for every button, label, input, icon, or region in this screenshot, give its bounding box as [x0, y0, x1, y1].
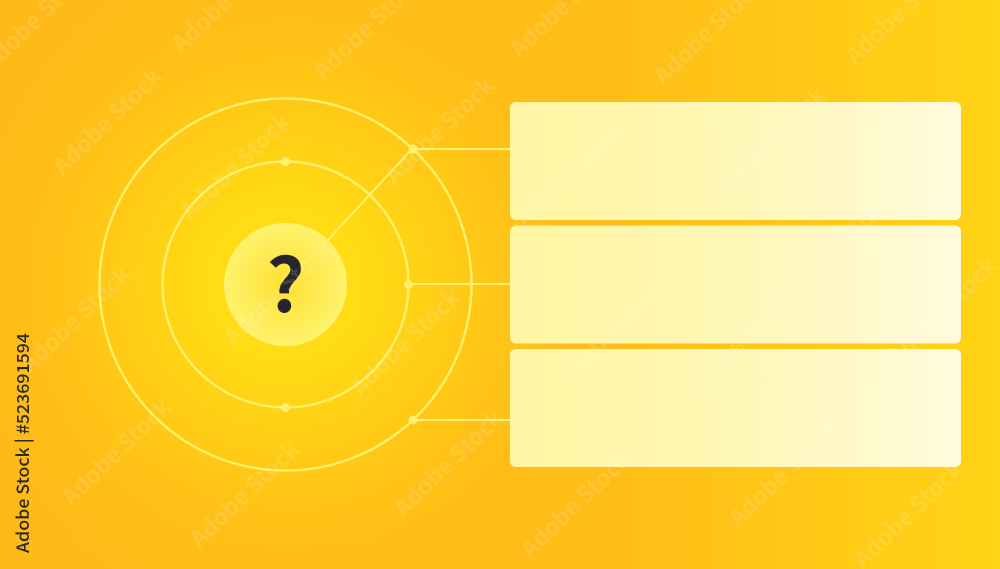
panel: bottom box	[510, 349, 961, 467]
outer ring	[100, 98, 472, 470]
question mark: ?	[266, 227, 305, 334]
watermarks: Adobe Stock	[547, 270, 673, 393]
watermarks: Adobe Stock	[11, 257, 137, 380]
watermarks: Adobe Stock	[707, 78, 833, 201]
watermarks: Adobe Stock	[52, 390, 178, 513]
watermarks: Adobe Stock	[384, 401, 510, 524]
watermarks: Adobe Stock	[836, 124, 962, 247]
centre hub with question mark	[224, 223, 347, 346]
watermarks: Adobe Stock	[180, 432, 306, 555]
watermarks: Adobe Stock	[375, 68, 501, 191]
watermarks: Adobe Stock	[878, 249, 1000, 372]
watermarks: Adobe Stock	[719, 411, 845, 534]
watermarks: Adobe Stock	[43, 59, 169, 182]
watermarks: Adobe Stock	[506, 111, 632, 234]
watermarks: Adobe Stock	[171, 104, 297, 227]
watermarks: Adobe Stock	[675, 281, 801, 404]
panel: middle box	[510, 226, 961, 344]
watermarks: Adobe Stock	[341, 280, 467, 403]
watermarks: Adobe Stock	[214, 230, 340, 353]
panel: top box	[510, 102, 961, 220]
inner ring	[162, 162, 408, 408]
watermarks: Adobe Stock	[511, 442, 637, 565]
vertical stock id label: Adobe Stock | #523691594	[9, 333, 34, 553]
concentric rings	[100, 98, 472, 470]
ring node dots	[281, 144, 418, 424]
connector lines	[326, 149, 510, 420]
